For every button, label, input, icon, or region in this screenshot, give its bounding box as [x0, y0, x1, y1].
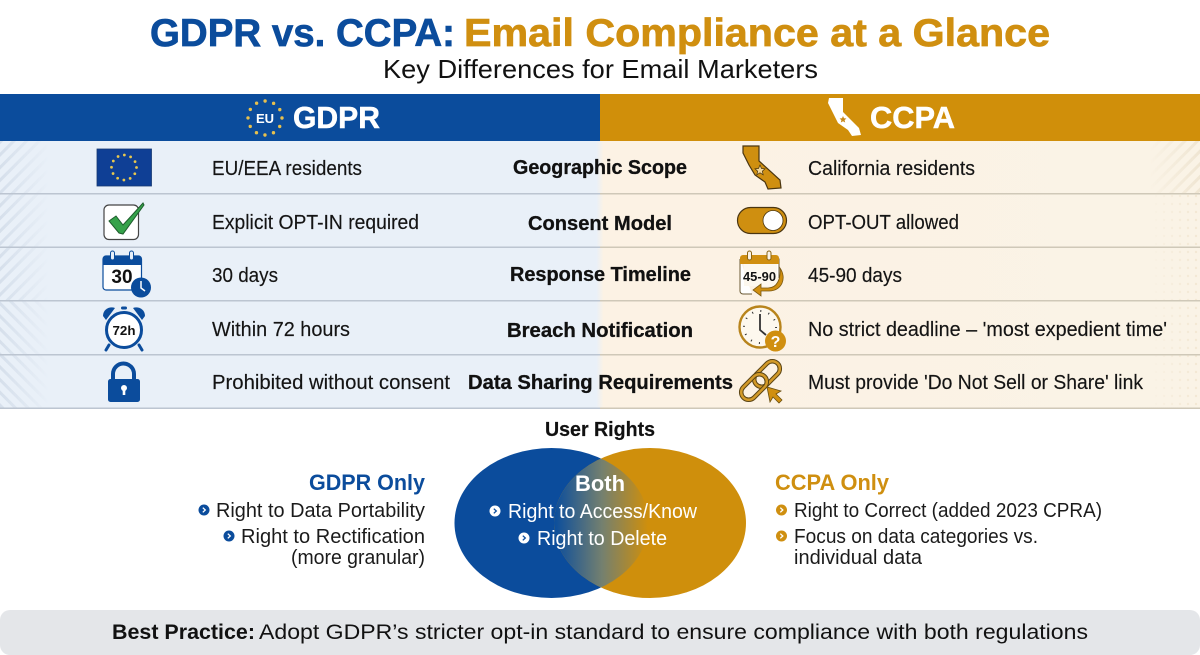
label: breach notification: Breach Notification [507, 319, 693, 342]
label: data sharing requirements: Data Sharing Requirements [468, 371, 733, 394]
bullet: data categories: Focus on data categories vs. [794, 526, 1038, 548]
header band [0, 94, 1200, 141]
icon: California map [743, 146, 781, 189]
icon: EU stars badge [248, 101, 282, 135]
icon: clock with question [740, 306, 786, 352]
CCPA consent: OPT-OUT allowed [808, 212, 959, 234]
CCPA breach: No strict deadline – 'most expedient time' [808, 319, 1167, 341]
title [150, 12, 1050, 55]
GDPR only heading: GDPR Only [309, 470, 426, 495]
GDPR sharing: Prohibited without consent [212, 372, 450, 394]
icon: chain link with cursor [738, 358, 783, 403]
CCPA circle [554, 448, 746, 598]
CCPA only list [775, 470, 1102, 569]
icon: California white [828, 98, 861, 136]
CCPA heading: CCPA [870, 100, 955, 135]
CCPA only heading: CCPA Only [775, 470, 890, 495]
icon: padlock [108, 364, 140, 402]
overlap [554, 458, 644, 588]
icon: EU stars badge: EU [256, 111, 274, 126]
label: geographic scope: Geographic Scope [513, 156, 687, 179]
icon: toggle [738, 208, 786, 234]
label: response timeline: Response Timeline [510, 263, 691, 286]
icon: alarm clock 72h: 72h [112, 323, 136, 338]
bullet: correct: Right to Correct (added 2023 CPRA) [794, 500, 1102, 522]
label: consent model: Consent Model [528, 212, 672, 235]
CCPA sharing: Must provide 'Do Not Sell or Share' link [808, 372, 1144, 394]
icon: EU flag [97, 149, 152, 186]
icon: calendar 30 [103, 251, 151, 298]
CCPA timeline: 45-90 days [808, 265, 902, 287]
CCPA scope: California residents [808, 158, 975, 180]
icon: calendar 45-90: 45-90 [743, 270, 776, 284]
bullet: rectification: Right to Rectification [241, 526, 425, 548]
bullet: rectification [224, 526, 425, 569]
GDPR consent: Explicit OPT-IN required [212, 212, 419, 234]
GDPR only list [198, 470, 426, 569]
best practice bar [0, 610, 1200, 655]
row: response timeline [103, 251, 902, 298]
row: consent model [104, 203, 959, 240]
row: breach notification [103, 306, 1167, 352]
GDPR circle [454, 448, 648, 598]
GDPR heading: GDPR [293, 100, 380, 135]
bullet: access: Right to Access/Know [508, 501, 698, 523]
bullet: data portability: Right to Data Portability [216, 500, 425, 522]
both heading: Both [575, 471, 625, 496]
icon: green checkbox [104, 203, 144, 240]
bullet: data categories: individual data [794, 547, 923, 569]
user rights heading: User Rights [545, 419, 655, 441]
icon: alarm clock 72h [103, 306, 145, 350]
bullet: rectification: (more granular) [291, 547, 425, 569]
GDPR scope: EU/EEA residents [212, 158, 362, 180]
comparison table [0, 141, 1200, 409]
venn diagram [454, 448, 746, 598]
icon: calendar 45-90 [740, 251, 783, 296]
subtitle: Key Differences for Email Marketers [383, 54, 818, 84]
icon: calendar 30: 30 [111, 267, 133, 288]
best practice bar: Best Practice: [112, 621, 255, 644]
GDPR breach: Within 72 hours [212, 319, 350, 341]
icon: clock with question: ? [771, 334, 780, 351]
best practice bar: Adopt GDPR’s stricter opt-in standard to ensure compliance with both regulations [259, 621, 1088, 644]
GDPR timeline: 30 days [212, 265, 278, 287]
title: Email Compliance at a Glance [464, 12, 1050, 55]
title: GDPR vs. CCPA: [150, 12, 455, 55]
row: data sharing [108, 358, 1144, 403]
bullet: delete: Right to Delete [537, 528, 667, 550]
bullet: data categories [776, 526, 1038, 569]
row: geographic scope [97, 146, 975, 189]
